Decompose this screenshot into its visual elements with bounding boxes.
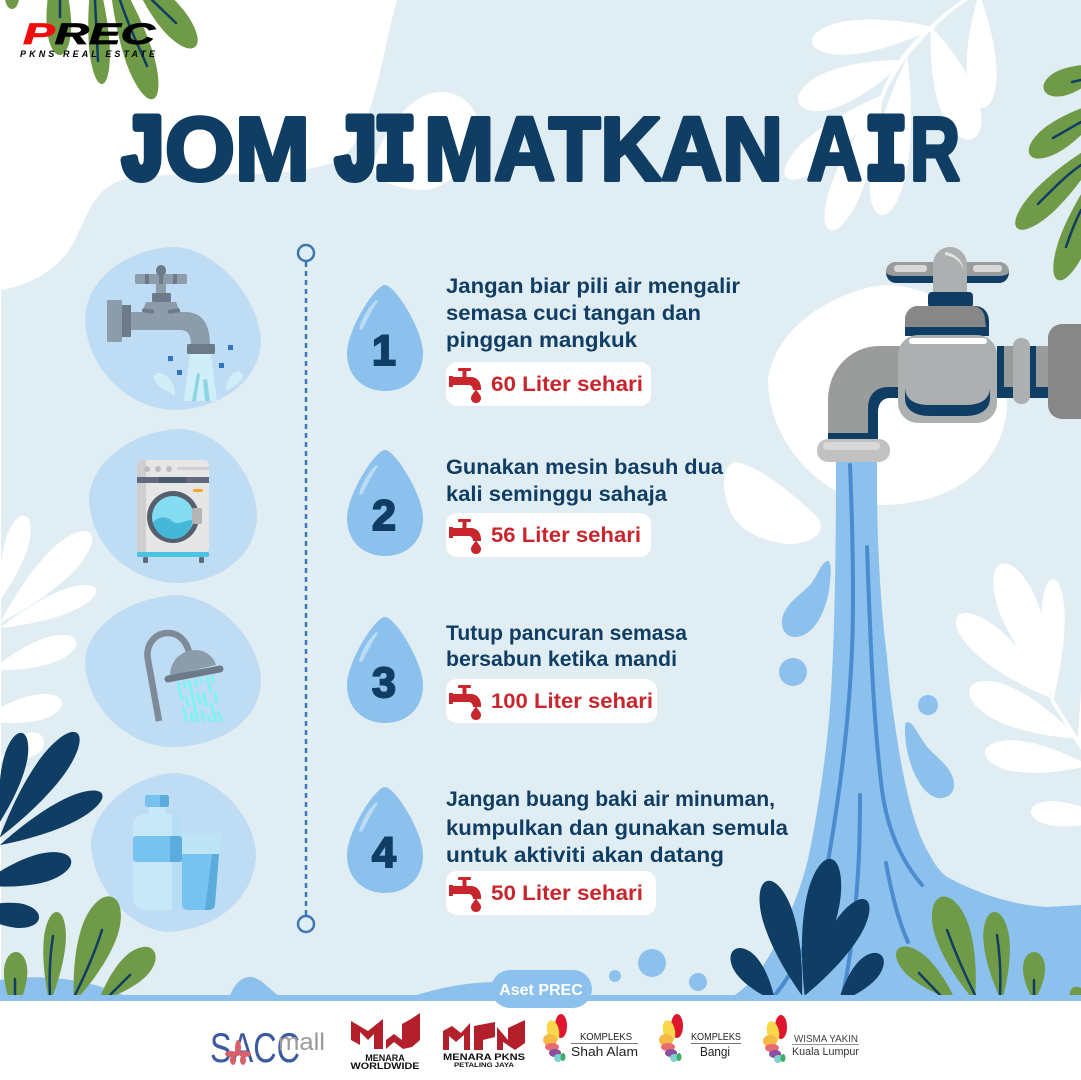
logo: Menara Worldwide: WORLDWIDE [350,1061,420,1071]
logo: Menara PKNS: MENARA PKNS [443,1052,525,1062]
title: I [865,101,907,206]
logo: Kompleks Bangi: KOMPLEKS [691,1031,741,1043]
spout [828,346,900,439]
text block: tip 3: bersabun ketika mandi [446,648,677,671]
white leaves: left [0,513,101,770]
logo: SACC mall: SACC [210,1024,300,1071]
logo: Wisma Yakin Kuala Lumpur [763,1015,859,1063]
water drop: 4 [347,787,423,893]
logo: Kompleks Shah Alam: KOMPLEKS [580,1031,632,1043]
logo: Menara PKNS [443,1020,525,1069]
text block: tip 4: kumpulkan dan gunakan semula [446,817,788,840]
panel: tip 3 shower icon [85,595,261,747]
title: A [807,100,862,200]
green leaves: right [1007,53,1081,285]
right pipe and flange [997,324,1081,419]
logo: PREC: PKNS REAL ESTATE [20,49,156,59]
water drop: 1 [347,285,423,391]
logo: Kompleks Shah Alam [543,1014,638,1062]
callout: 100 liter: 100 Liter sehari [491,690,653,713]
text block: tip 2 [446,456,723,506]
navy leaves: bottom right [724,856,890,1011]
large faucet [817,247,1081,462]
text block: tip 1: semasa cuci tangan dan [446,302,701,325]
text block: tip 1: pinggan mangkuk [446,329,637,352]
callout: 60 liter [446,362,651,406]
badge: Aset PREC: Aset PREC [499,982,583,999]
title: MATKAN [424,100,783,200]
text block: tip 2: Gunakan mesin basuh dua [446,456,723,479]
badge: Aset PREC [491,970,592,1008]
logo: Wisma Yakin Kuala Lumpur: WISMA YAKIN [794,1033,858,1045]
text block: tip 1 [446,275,740,352]
callout: 50 liter: 50 Liter sehari [491,882,643,905]
callout: 60 liter: 60 Liter sehari [491,373,643,396]
nozzle [817,439,890,462]
callout: 56 liter [446,513,651,557]
green leaves: bottom right [889,892,1081,1011]
title: OM [165,100,310,200]
water drop: 2: 2 [372,492,396,540]
text block: tip 4: untuk aktiviti akan datang [446,844,724,867]
water drop: 3: 3 [372,659,396,707]
logo: Menara Worldwide [350,1013,420,1071]
title: I [374,101,416,206]
panel: tip 4 bottle and glass icon [91,773,256,932]
text block: tip 4: Jangan buang baki air minuman, [446,788,775,811]
text block: tip 2: kali seminggu sahaja [446,483,667,506]
panel: tip 2 washing machine icon [89,429,257,583]
water drop: 2 [347,450,423,556]
logo: Kompleks Shah Alam: Shah Alam [571,1044,638,1059]
water drop: 4: 4 [372,829,396,877]
navy leaves: bottom left [0,724,108,930]
text block: tip 4 [446,788,788,867]
water droplets [609,561,954,991]
water stream [725,462,1081,1000]
text block: tip 3: Tutup pancuran semasa [446,622,687,645]
white leaves: lower right [947,557,1081,832]
logo: Menara PKNS: PETALING JAYA [454,1062,514,1069]
logo: Kompleks Bangi: Bangi [700,1044,730,1059]
text block: tip 1: Jangan biar pili air mengalir [446,275,740,298]
green leaves: top left [5,0,206,103]
callout: 50 liter [446,871,656,915]
logo: Menara Worldwide: MENARA [365,1053,405,1063]
handle [886,247,1009,308]
green leaves: bottom left [3,891,163,1014]
white leaves: top right [776,0,998,236]
logo: Wisma Yakin Kuala Lumpur: Kuala Lumpur [792,1046,859,1058]
panel: tip 1 faucet icon [85,247,261,410]
title: R [910,100,960,200]
callout: 100 liter [446,679,657,723]
title [120,100,960,206]
title: J [333,101,379,206]
text block: tip 3 [446,622,687,671]
logo: SACC mall: mall [278,1029,325,1056]
logo: PREC: P REC [23,18,157,51]
hills [0,977,500,996]
title: J [120,101,166,206]
logo: Kompleks Bangi [659,1014,741,1062]
callout: 56 liter: 56 Liter sehari [491,524,641,547]
timeline [298,245,314,932]
water drop: 1: 1 [372,327,396,375]
water drop: 3 [347,617,423,723]
valve body [898,306,997,423]
logo: PREC [20,18,157,59]
footer [0,995,1081,1080]
